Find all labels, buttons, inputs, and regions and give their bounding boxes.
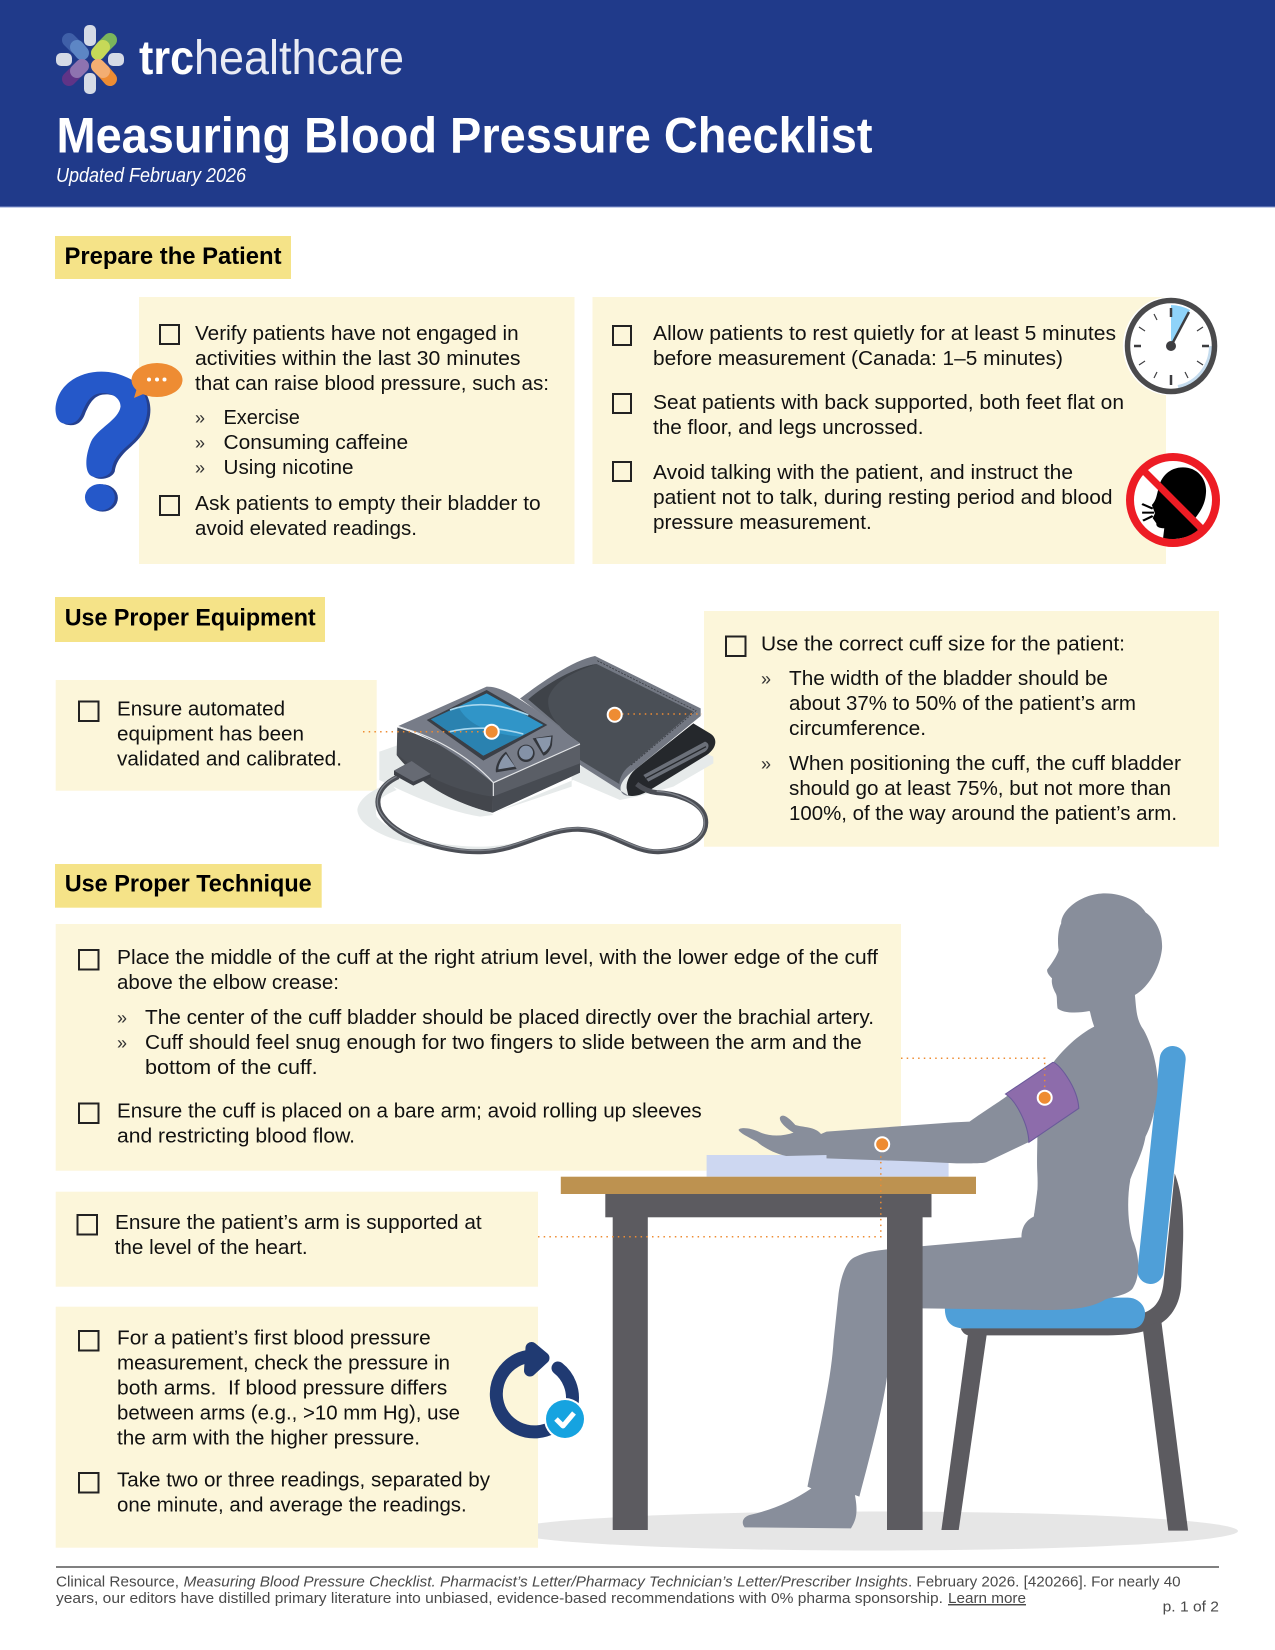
citation text: Measuring Blood Pressure Checklist. Pharmacist’s Letter/Pharmacy Technician’s Letter/Prescriber Insights: [184, 1575, 908, 1591]
checklist item: avoid talking: Avoid talking with the patient, and instruct the: [653, 462, 1073, 484]
panel: prepare left: [139, 297, 574, 564]
checklist item: avoid talking: pressure measurement.: [653, 512, 872, 534]
checklist item: cuff position: above the elbow crease:: [117, 972, 339, 994]
page number: p. 1 of 2: [1163, 1600, 1219, 1616]
heading: Prepare the Patient: [55, 236, 291, 279]
checklist item: avoid talking: patient not to talk, during resting period and blood: [653, 487, 1112, 509]
panel: equipment right: [704, 611, 1219, 847]
panel: equipment right: about 37% to 50% of the patient’s arm: [789, 693, 1136, 715]
updated date: Updated February 2026: [56, 165, 247, 187]
citation text: [56, 1575, 1181, 1607]
panel: technique readings: [56, 1307, 538, 1548]
icon: clock: [1123, 296, 1219, 396]
footer: [56, 1566, 1219, 1616]
icon: capsule logo mark: [56, 25, 124, 94]
heading: Use Proper Equipment: Use Proper Equipment: [65, 605, 316, 632]
checklist item: rest quietly: [613, 323, 1116, 370]
panel: equipment right: 100%, of the way around the patient’s arm.: [789, 803, 1177, 825]
checklist item: repeat readings: [79, 1470, 490, 1516]
illustration: chair: [941, 1059, 1188, 1531]
checklist item: both arms: For a patient’s first blood pressure: [117, 1328, 431, 1350]
panel: prepare right: [592, 297, 1166, 564]
checklist item: cuff position: [79, 947, 878, 1079]
checklist item: verify activities: »: [195, 458, 205, 478]
illustration: blood pressure monitor and cuff: [357, 656, 715, 852]
checklist item: repeat readings: one minute, and average the readings.: [117, 1494, 467, 1516]
checklist item: bare arm: [79, 1100, 702, 1148]
heading: Use Proper Technique: Use Proper Technique: [65, 871, 312, 898]
logo wordmark: healthcare: [194, 32, 404, 85]
citation text: Learn more: [948, 1591, 1026, 1607]
logo wordmark: trc: [139, 32, 194, 85]
checklist item: rest quietly: Allow patients to rest quietly for at least 5 minutes: [653, 323, 1116, 345]
title: Measuring Blood Pressure Checklist: [56, 108, 873, 164]
checklist item: both arms: between arms (e.g., >10 mm Hg), use: [117, 1403, 460, 1425]
panel: equipment right: »: [761, 669, 771, 689]
checklist item: cuff position: bottom of the cuff.: [145, 1057, 318, 1079]
callout: cuff leader line: [608, 708, 702, 722]
checklist item: verify activities: »: [195, 433, 205, 453]
panel: technique arm support: Ensure the patient’s arm is supported at: [115, 1212, 482, 1234]
checklist item: verify activities: Consuming caffeine: [224, 432, 408, 454]
checklist item: empty bladder: Ask patients to empty their bladder to: [195, 493, 541, 515]
checklist item: cuff position: Cuff should feel snug enough for two fingers to slide between the arm and the: [145, 1032, 862, 1054]
panel: technique arm support: the level of the heart.: [115, 1237, 308, 1259]
callout: cuff placement leader line: [901, 1058, 1052, 1105]
checklist item: verify activities: Exercise: [224, 407, 300, 429]
icon: no talking: [1126, 453, 1220, 547]
checklist item: verify activities: [160, 323, 549, 479]
illustration: desk: [561, 1177, 976, 1530]
checklist item: both arms: the arm with the higher pressure.: [117, 1428, 420, 1450]
checklist item: avoid talking: [613, 462, 1112, 534]
citation text: . February 2026. [420266]. For nearly 40: [908, 1575, 1181, 1591]
panel: equipment left: equipment has been: [117, 724, 304, 746]
panel: equipment right: should go at least 75%, but not more than: [789, 778, 1171, 800]
checklist item: both arms: both arms. If blood pressure differs: [117, 1378, 447, 1400]
checklist item: seat patients: the floor, and legs uncrossed.: [653, 417, 924, 439]
callout: arm support leader line: [538, 1137, 889, 1237]
heading: Use Proper Equipment: [55, 597, 325, 642]
checklist item: both arms: measurement, check the pressure in: [117, 1353, 450, 1375]
panel: equipment right: circumference.: [789, 718, 926, 740]
illustration: arm cuff: [1005, 1062, 1079, 1142]
panel: equipment left: Ensure automated: [117, 699, 285, 721]
checklist item: verify activities: Using nicotine: [224, 457, 354, 479]
panel: equipment right: Use the correct cuff size for the patient:: [761, 634, 1125, 656]
panel: equipment right: The width of the bladder should be: [789, 668, 1108, 690]
illustration: seated patient silhouette: [739, 893, 1162, 1528]
icon: repeat arrow with check: [496, 1348, 586, 1440]
checklist item: bare arm: Ensure the cuff is placed on a bare arm; avoid rolling up sleeves: [117, 1100, 702, 1122]
panel: technique cuff placement: [56, 924, 901, 1171]
checklist item: repeat readings: Take two or three readings, separated by: [117, 1470, 490, 1492]
icon: question mark with speech bubble: [55, 363, 183, 512]
panel: equipment left: [56, 680, 377, 791]
checklist item: seat patients: Seat patients with back supported, both feet flat on: [653, 392, 1124, 414]
checklist item: empty bladder: [160, 493, 541, 540]
checklist item: cuff position: Place the middle of the cuff at the right atrium level, with the lower edge of the cuff: [117, 947, 878, 969]
panel: equipment left: validated and calibrated.: [117, 749, 342, 771]
panel: equipment right: »: [761, 754, 771, 774]
checklist item: verify activities: activities within the last 30 minutes: [195, 348, 520, 370]
book under arm: [707, 1155, 949, 1177]
heading: Prepare the Patient: Prepare the Patient: [64, 243, 282, 270]
checklist item: verify activities: Verify patients have not engaged in: [195, 323, 519, 345]
checklist item: rest quietly: before measurement (Canada: 1–5 minutes): [653, 348, 1063, 370]
checklist item: cuff position: The center of the cuff bladder should be placed directly over the brachial artery.: [145, 1007, 874, 1029]
panel: technique arm support: [56, 1192, 538, 1287]
heading: Use Proper Technique: [55, 864, 322, 908]
logo: trc healthcare: [56, 25, 404, 94]
checklist item: both arms: [79, 1328, 460, 1450]
panel: equipment right: When positioning the cuff, the cuff bladder: [789, 753, 1181, 775]
checklist item: verify activities: that can raise blood pressure, such as:: [195, 373, 549, 395]
citation text: Clinical Resource,: [56, 1575, 179, 1591]
checklist item: verify activities: »: [195, 408, 205, 428]
checklist item: seat patients: [613, 392, 1124, 439]
callout: monitor leader line: [363, 725, 499, 739]
checklist item: empty bladder: avoid elevated readings.: [195, 518, 417, 540]
header banner: [0, 0, 1275, 208]
checklist item: cuff position: »: [117, 1033, 127, 1053]
floor shadow: [510, 1512, 1238, 1550]
citation text: years, our editors have distilled primary literature into unbiased, evidence-based recommendations with 0% pharma sponsorship.: [56, 1591, 943, 1607]
checklist item: cuff position: »: [117, 1008, 127, 1028]
checklist item: bare arm: and restricting blood flow.: [117, 1126, 355, 1148]
